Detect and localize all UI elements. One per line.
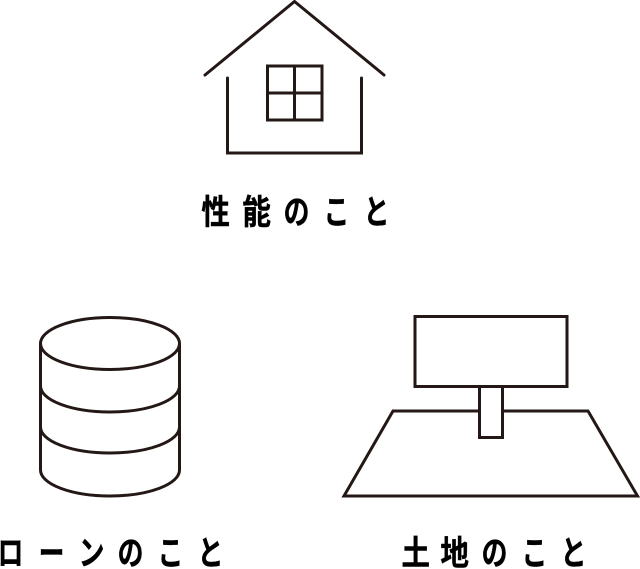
label: performance: こ (323, 194, 349, 232)
label: performance: の (283, 194, 309, 232)
label: performance (201, 194, 389, 232)
label: land (401, 535, 586, 569)
label: performance: 性 (201, 194, 229, 232)
sign post (480, 386, 502, 438)
icon: land with sign (344, 316, 638, 496)
sign board (415, 316, 567, 386)
house window (268, 66, 322, 120)
label: loan (0, 535, 223, 569)
land plot (344, 411, 638, 496)
label: performance: 能 (242, 194, 271, 232)
label: performance: と (364, 194, 389, 232)
icon: stacked cylinder (40, 318, 180, 496)
icon: house (205, 2, 384, 153)
cylinder top (40, 318, 180, 370)
cylinder sides and bands (40, 344, 180, 496)
house roof (205, 2, 384, 75)
house walls (228, 78, 362, 153)
